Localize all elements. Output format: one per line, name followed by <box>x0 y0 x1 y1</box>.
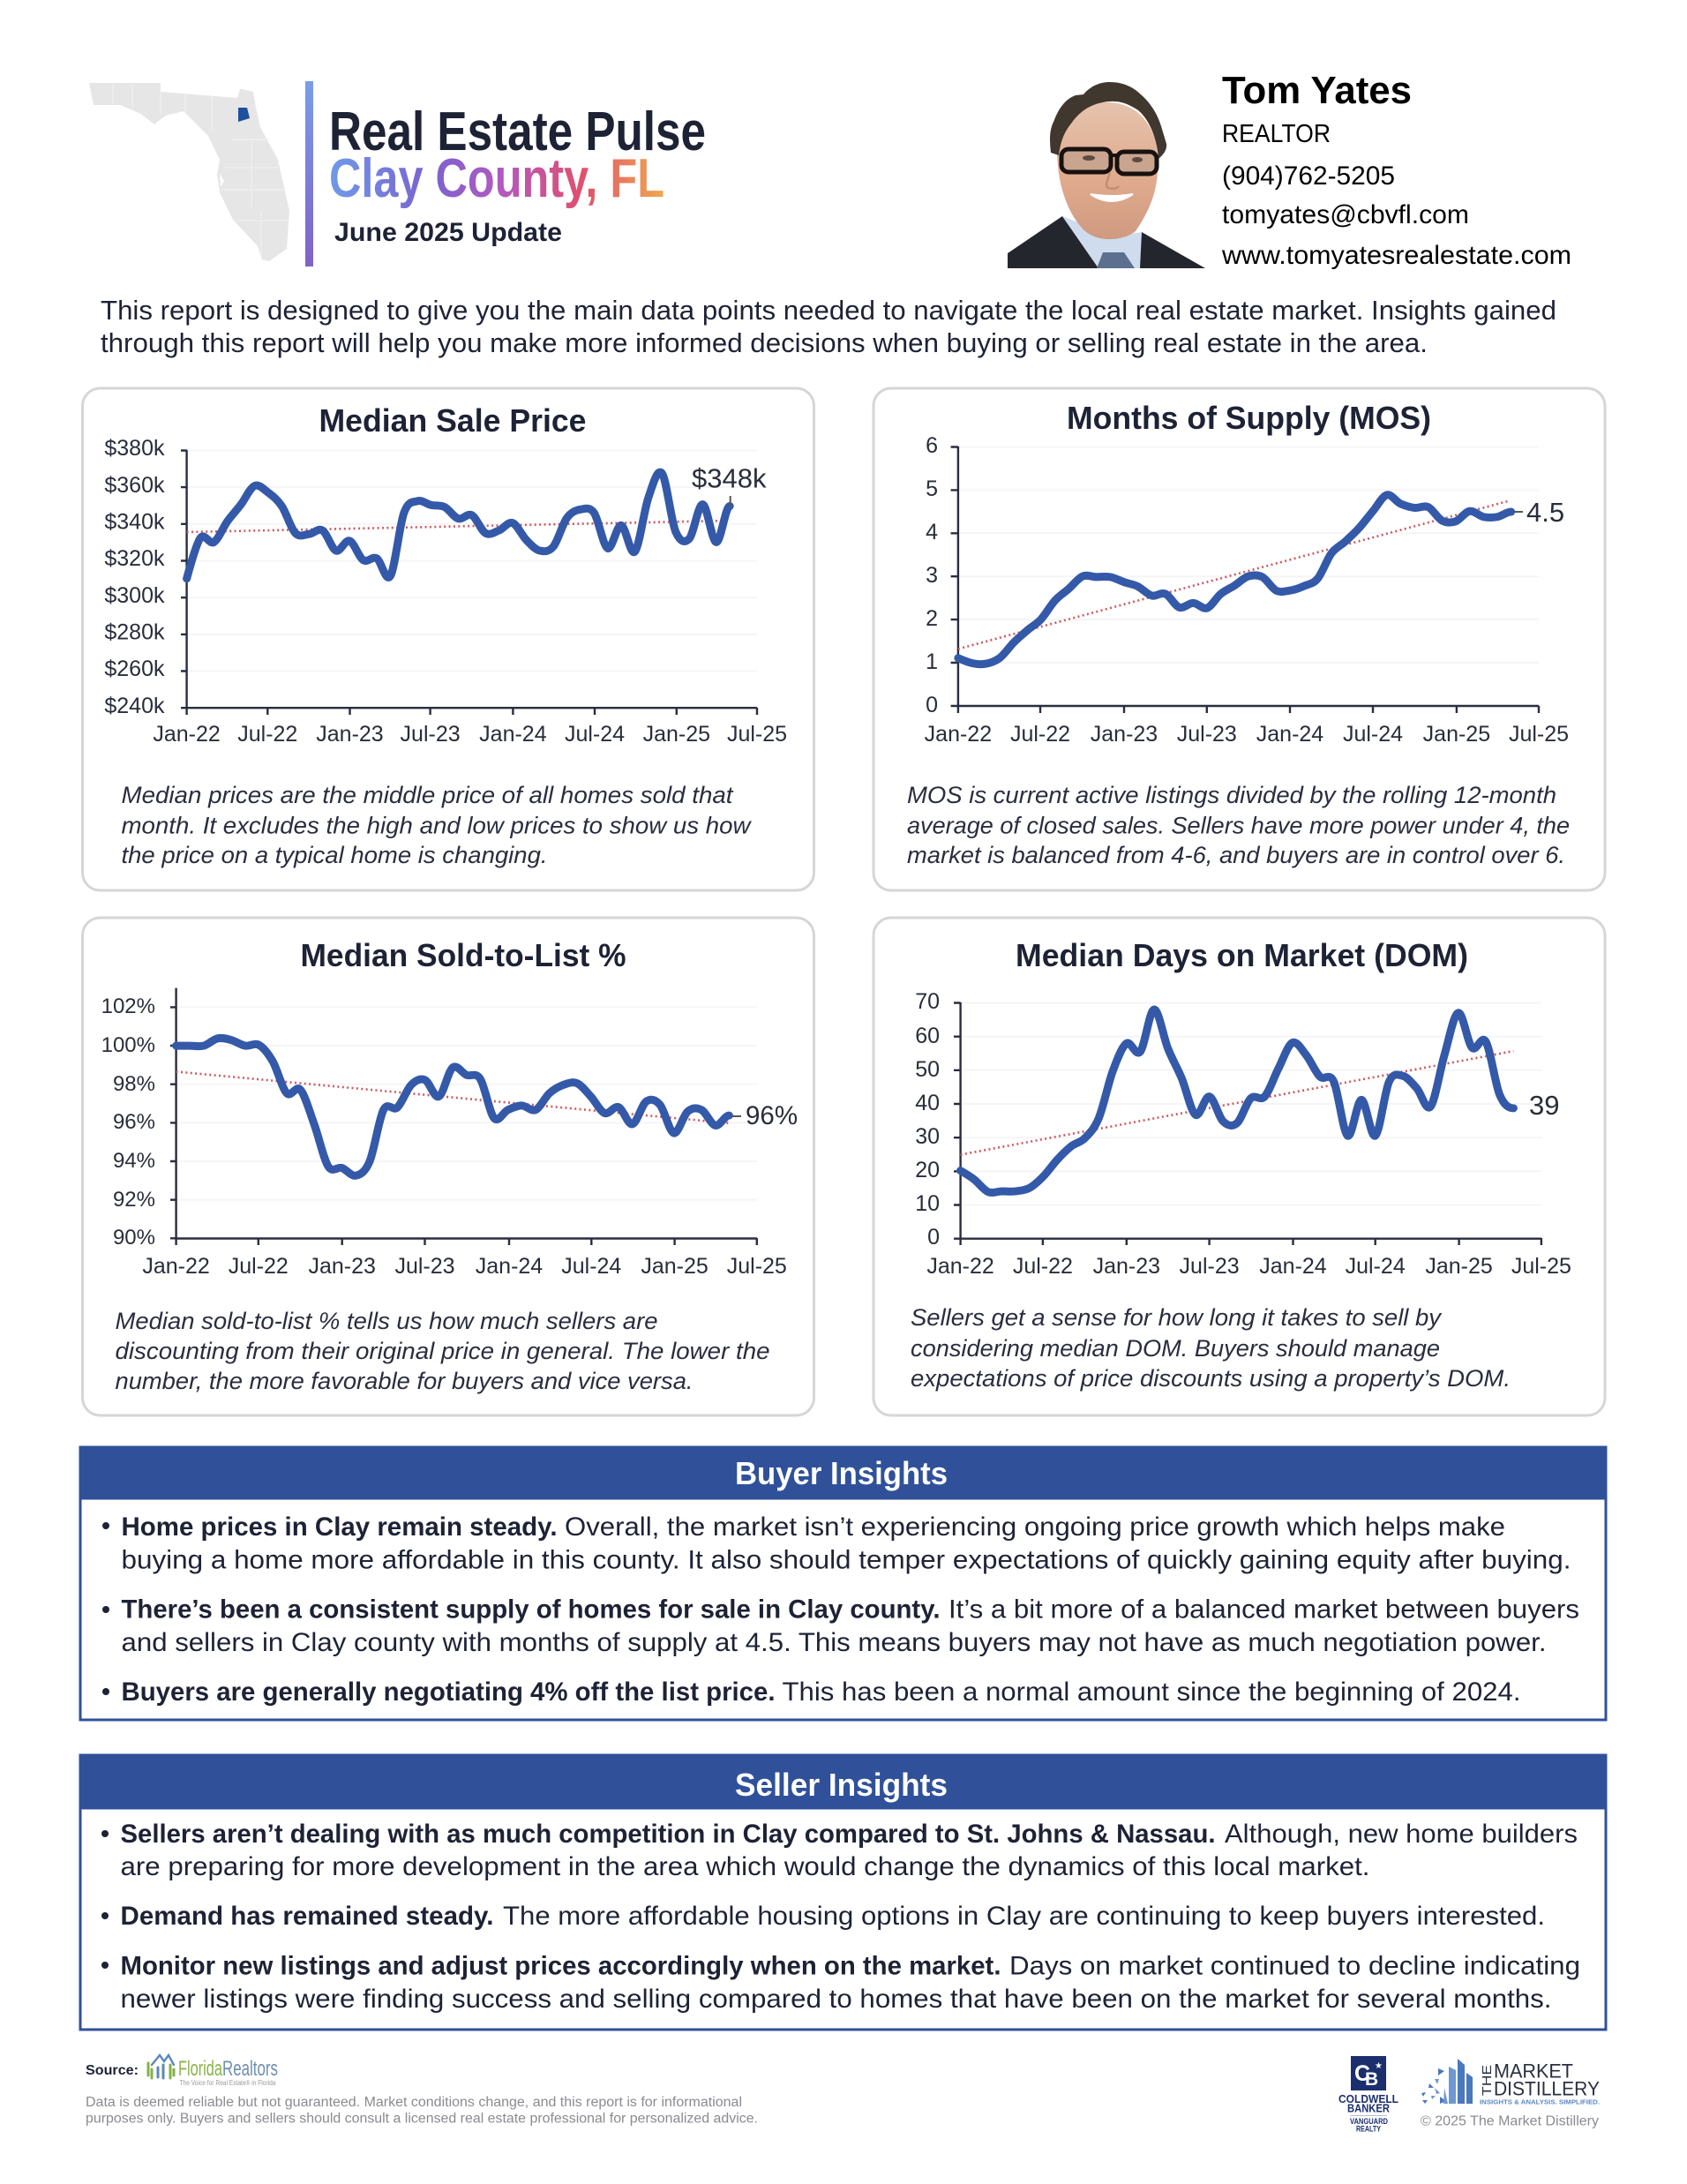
bullet: supply: and sellers in Clay county with months of supply at 4.5. This means buyers may not have as much negotiation power. <box>122 1628 1546 1657</box>
bullet: monitor listings: Monitor new listings and adjust prices accordingly when on the market. <box>120 1952 1001 1980</box>
heading: Months of Supply (MOS) <box>1067 400 1431 436</box>
disclaimer <box>86 2095 758 2127</box>
disclaimer: purposes only. Buyers and sellers should consult a licensed real estate professional for personalized advice. <box>86 2111 758 2127</box>
logo: The Market Distillery <box>1421 2059 1600 2128</box>
description: Median prices are the middle price of all homes sold that <box>122 782 734 808</box>
bullet: competition: are preparing for more development in the area which would change the dynamics of this local market. <box>120 1852 1369 1881</box>
line chart: months of supply <box>925 433 1569 747</box>
source line with Florida Realtors logo: Source: <box>86 2063 139 2078</box>
line chart: median sale price: $300k <box>104 583 165 608</box>
line chart: days on market: 40 <box>915 1091 940 1115</box>
line chart: months of supply: Jul-24 <box>1343 722 1403 747</box>
line chart: sold-to-list: Jul-23 <box>394 1254 455 1279</box>
line chart: sold-to-list: 92% <box>113 1188 155 1212</box>
logo: Coldwell Banker <box>1338 2056 1398 2134</box>
panel: median sale price <box>83 388 814 890</box>
bullet: negotiating: Buyers are generally negotiating 4% off the list price. <box>122 1677 775 1707</box>
line chart: days on market: 20 <box>915 1158 940 1182</box>
description: the price on a typical home is changing. <box>122 842 547 868</box>
date: June 2025 Update <box>334 218 562 247</box>
line chart: median sale price: $348k <box>692 462 767 494</box>
logo: Coldwell Banker: REALTY <box>1356 2125 1381 2134</box>
description: discounting from their original price in general. The lower the <box>115 1338 770 1364</box>
line chart: sold-to-list: Jul-22 <box>229 1254 289 1279</box>
line chart: days on market: 0 <box>927 1225 940 1250</box>
line chart: median sale price: $340k <box>104 510 165 535</box>
line chart: days on market: 60 <box>915 1024 940 1048</box>
bullet: competition: Although, new home builders <box>1225 1820 1578 1849</box>
line chart: months of supply: 4 <box>926 520 938 544</box>
panel: median sold-to-list <box>83 918 814 1415</box>
line chart: days on market: Jul-22 <box>1013 1254 1073 1279</box>
agent phone: (904)762-5205 <box>1222 161 1395 191</box>
line chart: months of supply: Jan-24 <box>1256 722 1323 747</box>
line chart: median sale price: $360k <box>104 473 165 498</box>
line chart: months of supply: 4.5 <box>1526 497 1564 528</box>
heading: Median Sold-to-List % <box>300 937 626 973</box>
line chart: median sale price: Jul-22 <box>237 722 297 747</box>
description <box>907 782 1570 868</box>
title block <box>329 101 706 247</box>
description <box>115 1308 770 1394</box>
line chart: months of supply: 2 <box>926 606 938 631</box>
line chart: months of supply: 1 <box>926 649 938 674</box>
line chart: sold-to-list: 90% <box>113 1226 155 1250</box>
logo: The Market Distillery: THE <box>1480 2065 1495 2096</box>
disclaimer: Data is deemed reliable but not guaranteed. Market conditions change, and this report is for informational <box>86 2095 742 2110</box>
logo: Coldwell Banker: BANKER <box>1347 2102 1391 2114</box>
line chart: days on market: Jan-22 <box>926 1254 994 1279</box>
line chart: days on market: Jan-24 <box>1259 1254 1327 1279</box>
source line with Florida Realtors logo: Realtors <box>222 2057 278 2081</box>
bullet: competition <box>101 1820 1578 1881</box>
line chart: sold-to-list: Jan-24 <box>476 1254 543 1279</box>
line chart: sold-to-list <box>101 988 798 1279</box>
logo: The Market Distillery: INSIGHTS & ANALYSIS. SIMPLIFIED. <box>1480 2098 1600 2105</box>
heading: Median Days on Market (DOM) <box>1016 937 1468 973</box>
intro text <box>101 295 1556 358</box>
line chart: median sale price: Jul-24 <box>565 722 625 747</box>
line chart: median sale price: Jul-23 <box>401 722 461 747</box>
bullet: competition: Sellers aren’t dealing with as much competition in Clay compared to St. Johns & Nassau. <box>120 1820 1216 1849</box>
line chart: days on market: Jul-24 <box>1346 1254 1406 1279</box>
source line with Florida Realtors logo: The Voice for Real Estate® in Florida <box>180 2079 276 2087</box>
line chart: months of supply: Jul-25 <box>1509 722 1569 747</box>
bullet: home prices <box>102 1512 1571 1574</box>
line chart: days on market: 30 <box>915 1124 940 1149</box>
line chart: days on market <box>915 989 1571 1279</box>
line chart: sold-to-list: 100% <box>101 1033 155 1057</box>
bullet: monitor listings <box>101 1952 1580 2014</box>
bullet: supply: There’s been a consistent supply of homes for sale in Clay county. <box>122 1595 941 1624</box>
logo: Coldwell Banker: COLDWELL <box>1338 2092 1398 2105</box>
icon: buildings and fragments <box>1421 2059 1473 2104</box>
agent role: REALTOR <box>1222 120 1331 148</box>
line chart: sold-to-list: 98% <box>113 1072 155 1096</box>
line chart: days on market: Jan-25 <box>1425 1254 1493 1279</box>
line chart: sold-to-list: 96% <box>746 1101 798 1130</box>
logo: The Market Distillery: DISTILLERY <box>1494 2077 1600 2100</box>
line chart: days on market: 70 <box>915 989 940 1014</box>
description: average of closed sales. Sellers have more power under 4, the <box>907 812 1570 838</box>
line chart: median sale price: $260k <box>104 657 165 681</box>
line chart: days on market: Jul-23 <box>1180 1254 1240 1279</box>
line chart: median sale price: $280k <box>104 619 165 644</box>
line chart: median sale price: $240k <box>104 694 165 718</box>
line chart: median sale price <box>104 436 787 747</box>
line chart: sold-to-list: 94% <box>113 1149 155 1173</box>
agent portrait <box>1008 82 1205 268</box>
logo: The Market Distillery: MARKET <box>1494 2060 1573 2083</box>
line chart: months of supply: 6 <box>926 433 938 458</box>
panel: seller insights <box>79 1754 1608 2030</box>
bullet: demand: Demand has remained steady. <box>120 1902 494 1931</box>
logo: Coldwell Banker: C <box>1354 2061 1370 2086</box>
description: MOS is current active listings divided by the rolling 12-month <box>907 782 1556 808</box>
bullet: home prices: buying a home more affordable in this county. It also should temper expectations of quickly gaining equity after buying. <box>122 1546 1571 1574</box>
panel: months of supply <box>873 388 1605 890</box>
accent bar <box>305 81 313 266</box>
line chart: days on market: Jan-23 <box>1093 1254 1160 1279</box>
line chart: sold-to-list: Jan-22 <box>142 1254 210 1279</box>
line chart: sold-to-list: Jul-25 <box>727 1254 787 1279</box>
heading: Median Sale Price <box>319 402 586 439</box>
description: number, the more favorable for buyers and vice versa. <box>115 1368 694 1394</box>
line chart: median sale price: $380k <box>104 436 165 461</box>
source line with Florida Realtors logo: Florida <box>178 2057 222 2081</box>
logo: Coldwell Banker: B <box>1365 2069 1378 2090</box>
panel: buyer insights <box>79 1445 1608 1720</box>
description: Sellers get a sense for how long it takes to sell by <box>911 1304 1443 1331</box>
line chart: months of supply: 5 <box>926 477 938 501</box>
line chart: sold-to-list: Jul-24 <box>561 1254 621 1279</box>
line chart: months of supply: Jan-25 <box>1423 722 1490 747</box>
bullet: supply: It’s a bit more of a balanced market between buyers <box>948 1595 1579 1624</box>
description: considering median DOM. Buyers should manage <box>911 1335 1440 1362</box>
bullet: supply <box>102 1595 1579 1657</box>
line chart: median sale price: Jul-25 <box>727 722 787 747</box>
description: month. It excludes the high and low prices to show us how <box>122 812 752 838</box>
bullet: home prices: Overall, the market isn’t experiencing ongoing price growth which helps make <box>565 1512 1505 1542</box>
line chart: median sale price: Jan-25 <box>643 722 710 747</box>
line chart: months of supply: Jan-22 <box>925 722 992 747</box>
line chart: median sale price: Jan-24 <box>479 722 547 747</box>
bullet: monitor listings: Days on market continued to decline indicating <box>1009 1952 1580 1980</box>
heading: Seller Insights <box>735 1767 948 1803</box>
line chart: days on market: 10 <box>915 1191 940 1216</box>
line chart: months of supply: 0 <box>926 693 938 717</box>
description <box>911 1304 1511 1392</box>
bullet: demand <box>101 1902 1545 1931</box>
line chart: median sale price: Jan-22 <box>153 722 221 747</box>
bullet: negotiating: This has been a normal amount since the beginning of 2024. <box>782 1677 1521 1707</box>
line chart: sold-to-list: Jan-23 <box>308 1254 376 1279</box>
description: expectations of price discounts using a property’s DOM. <box>911 1365 1511 1392</box>
agent name: Tom Yates <box>1222 69 1412 112</box>
line chart: months of supply: Jan-23 <box>1091 722 1158 747</box>
title: Real Estate Pulse <box>329 101 706 162</box>
bullet: demand: The more affordable housing options in Clay are continuing to keep buyers interested. <box>503 1902 1545 1931</box>
line chart: months of supply: Jul-22 <box>1010 722 1070 747</box>
icon: Florida map with Clay County highlighted <box>89 83 289 261</box>
copyright: © 2025 The Market Distillery <box>1421 2114 1599 2128</box>
panel: median days on market <box>873 918 1605 1415</box>
intro text: through this report will help you make more informed decisions when buying or selling real estate in the area. <box>101 327 1428 358</box>
line chart: median sale price: $320k <box>104 546 165 571</box>
line chart: months of supply: Jul-23 <box>1177 722 1237 747</box>
description <box>122 782 752 868</box>
line chart: sold-to-list: 96% <box>113 1110 155 1134</box>
agent website: www.tomyatesrealestate.com <box>1221 241 1571 270</box>
intro text: This report is designed to give you the main data points needed to navigate the local real estate market. Insights gained <box>101 295 1556 326</box>
agent contact <box>1221 69 1571 270</box>
line chart: sold-to-list: Jan-25 <box>641 1254 709 1279</box>
subtitle: county: Clay County, FL <box>329 148 664 209</box>
description: Median sold-to-list % tells us how much sellers are <box>115 1308 658 1334</box>
line chart: days on market: Jul-25 <box>1511 1254 1571 1279</box>
line chart: sold-to-list: 102% <box>101 994 155 1018</box>
agent email: tomyates@cbvfl.com <box>1222 200 1469 229</box>
description: market is balanced from 4-6, and buyers are in control over 6. <box>907 842 1565 868</box>
source line with Florida Realtors logo <box>86 2055 278 2087</box>
bullet: home prices: Home prices in Clay remain steady. <box>122 1512 558 1542</box>
logo: Coldwell Banker: ★ <box>1375 2061 1383 2071</box>
bullet: negotiating <box>102 1677 1521 1707</box>
logo: Coldwell Banker: VANGUARD <box>1350 2117 1388 2126</box>
line chart: days on market: 39 <box>1529 1090 1559 1121</box>
line chart: days on market: 50 <box>915 1057 940 1082</box>
line chart: median sale price: Jan-23 <box>316 722 384 747</box>
heading: Buyer Insights <box>735 1455 948 1491</box>
line chart: months of supply: 3 <box>926 563 938 588</box>
icon: Florida Realtors house <box>148 2055 174 2078</box>
bullet: monitor listings: newer listings were finding success and selling compared to homes that have been on the market for several months. <box>120 1985 1551 2014</box>
